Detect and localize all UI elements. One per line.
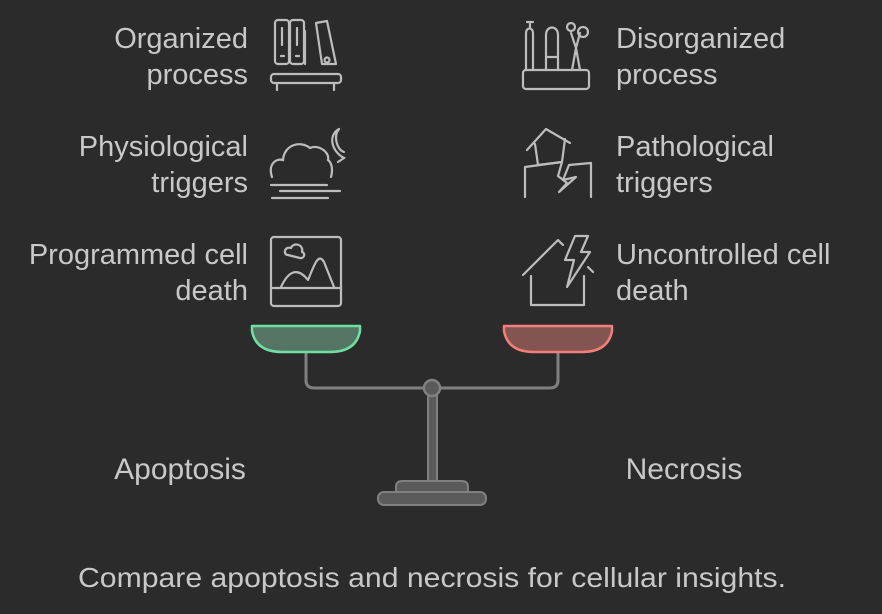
label: organized process: process <box>146 59 248 91</box>
pan: apoptosis (green) <box>252 326 360 352</box>
icon: cloud and moon <box>271 129 344 198</box>
label: pathological triggers <box>616 131 774 199</box>
label: necrosis: Necrosis <box>626 453 742 486</box>
label: disorganized process: process <box>616 59 718 91</box>
post <box>428 394 437 482</box>
label: programmed cell death <box>29 239 248 307</box>
label: organized process <box>114 23 248 91</box>
icon: earthquake house <box>525 129 591 197</box>
label: physiological triggers: Physiological <box>79 131 248 163</box>
label: disorganized process <box>616 23 785 91</box>
pivot <box>424 380 440 396</box>
label: organized process: Organized <box>114 23 248 55</box>
label: pathological triggers: triggers <box>616 167 713 199</box>
pan: necrosis (red) <box>504 326 612 352</box>
caption: Compare apoptosis and necrosis for cellular insights. <box>78 562 786 593</box>
icon: pencil cup <box>523 22 589 89</box>
balance scale <box>252 326 612 505</box>
label: uncontrolled cell death: death <box>616 275 689 307</box>
icon: house with lightning <box>523 236 593 305</box>
label: apoptosis: Apoptosis <box>114 453 246 486</box>
label: disorganized process: Disorganized <box>616 23 785 55</box>
label: pathological triggers: Pathological <box>616 131 774 163</box>
icon: picture frame <box>271 237 341 306</box>
label: physiological triggers <box>79 131 248 199</box>
base <box>396 481 468 492</box>
label: programmed cell death: Programmed cell <box>29 239 248 271</box>
label: programmed cell death: death <box>175 275 248 307</box>
label: physiological triggers: triggers <box>151 167 248 199</box>
label: uncontrolled cell death <box>616 239 830 307</box>
icon: bookshelf <box>271 20 341 90</box>
beam and arms <box>306 352 558 388</box>
label: uncontrolled cell death: Uncontrolled cell <box>616 239 830 271</box>
